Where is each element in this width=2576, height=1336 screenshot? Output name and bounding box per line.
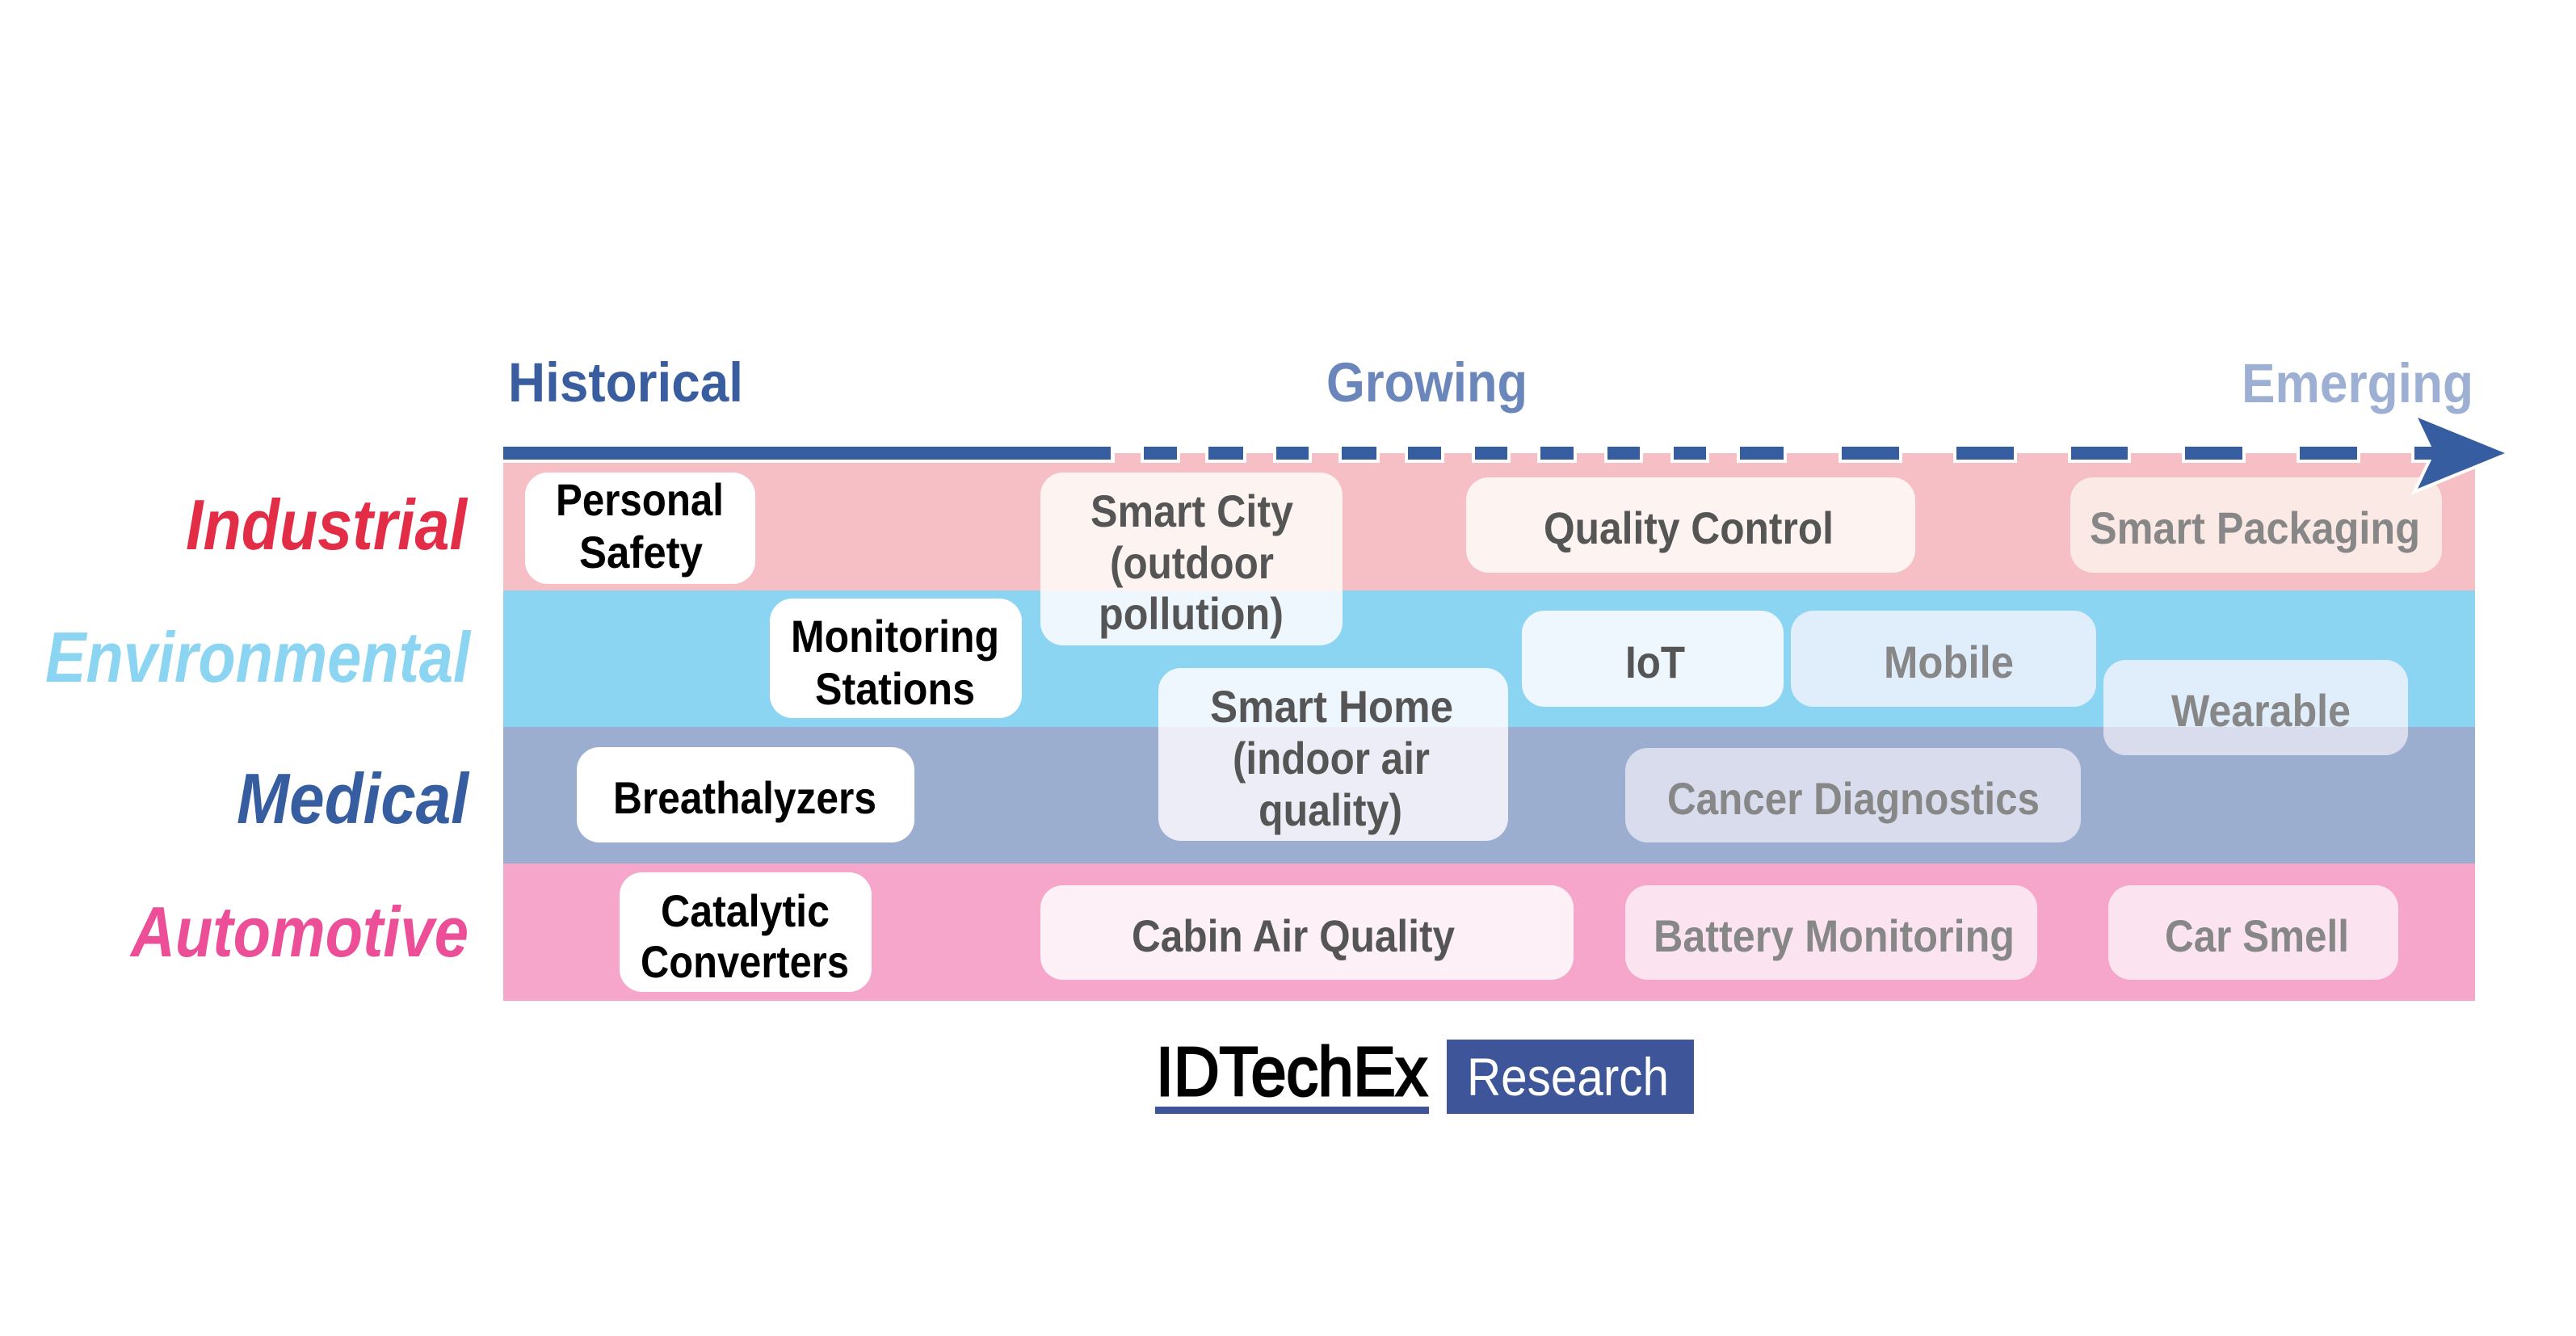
logo: IDTechEx Research: IDTechEx	[1156, 1034, 1427, 1111]
label: Medical: Medical	[237, 758, 469, 838]
box: Wearable	[2103, 660, 2408, 755]
heading: Historical: Historical	[508, 351, 743, 414]
box: Cabin Air Quality: Cabin Air Quality	[1132, 910, 1455, 961]
label: Automotive: Automotive	[129, 892, 469, 972]
box: Monitoring Stations: Stations	[815, 663, 975, 714]
box: Personal Safety: Personal	[556, 474, 724, 525]
box: Quality Control	[1466, 477, 1915, 573]
label: Industrial: Industrial	[186, 485, 468, 565]
box: Monitoring Stations	[770, 599, 1022, 718]
box: Car Smell: Car Smell	[2165, 910, 2349, 961]
coloured sector bands	[503, 453, 2475, 1001]
label: Environmental: Environmental	[45, 617, 471, 697]
band: medical	[503, 727, 2475, 863]
box: Breathalyzers	[577, 747, 914, 842]
box: Battery Monitoring	[1625, 885, 2037, 980]
box: Smart City: Smart City	[1090, 485, 1293, 536]
box: Catalytic Converters	[620, 872, 872, 992]
box: Catalytic Converters: Catalytic	[661, 885, 830, 936]
box: Cancer Diagnostics: Cancer Diagnostics	[1667, 773, 2040, 824]
box: Personal Safety	[525, 473, 755, 584]
box: Personal Safety: Safety	[579, 527, 703, 578]
box: Monitoring Stations: Monitoring	[791, 611, 999, 662]
box: IoT: IoT	[1625, 636, 1685, 687]
logo: IDTechEx Research	[1155, 1034, 1694, 1114]
heading: Emerging: Emerging	[2242, 352, 2473, 414]
heading: Growing: Growing	[1326, 351, 1528, 414]
logo: IDTechEx Research: Research	[1467, 1047, 1669, 1107]
band: industrial	[503, 453, 2475, 590]
box: Mobile: Mobile	[1884, 636, 2014, 687]
box: Smart Home: quality)	[1259, 784, 1402, 835]
box: Wearable: Wearable	[2171, 685, 2351, 736]
box: Smart Home: Smart Home	[1210, 681, 1453, 732]
band: environmental	[503, 590, 2475, 727]
box: Quality Control: Quality Control	[1544, 502, 1834, 553]
box: Smart Packaging	[2070, 477, 2442, 573]
box: Battery Monitoring: Battery Monitoring	[1654, 910, 2015, 961]
box: Smart City: (outdoor	[1110, 537, 1274, 588]
box: Cancer Diagnostics	[1625, 748, 2081, 842]
timeline headings	[508, 351, 2473, 414]
box: Catalytic Converters: Converters	[641, 936, 849, 987]
box: IoT	[1522, 611, 1784, 707]
box: Breathalyzers: Breathalyzers	[613, 772, 876, 823]
box: Cabin Air Quality	[1040, 885, 1574, 980]
box: Smart City: pollution)	[1099, 588, 1284, 639]
box: Smart City	[1040, 473, 1343, 645]
box: Smart Home: (indoor air	[1233, 733, 1430, 784]
box: Smart Home	[1158, 668, 1508, 841]
row labels	[45, 485, 471, 972]
timeline arrow	[500, 418, 2505, 489]
box: Mobile	[1791, 611, 2096, 707]
box: Smart Packaging: Smart Packaging	[2090, 502, 2420, 553]
band: automotive	[503, 863, 2475, 1001]
box: Car Smell	[2108, 885, 2398, 980]
